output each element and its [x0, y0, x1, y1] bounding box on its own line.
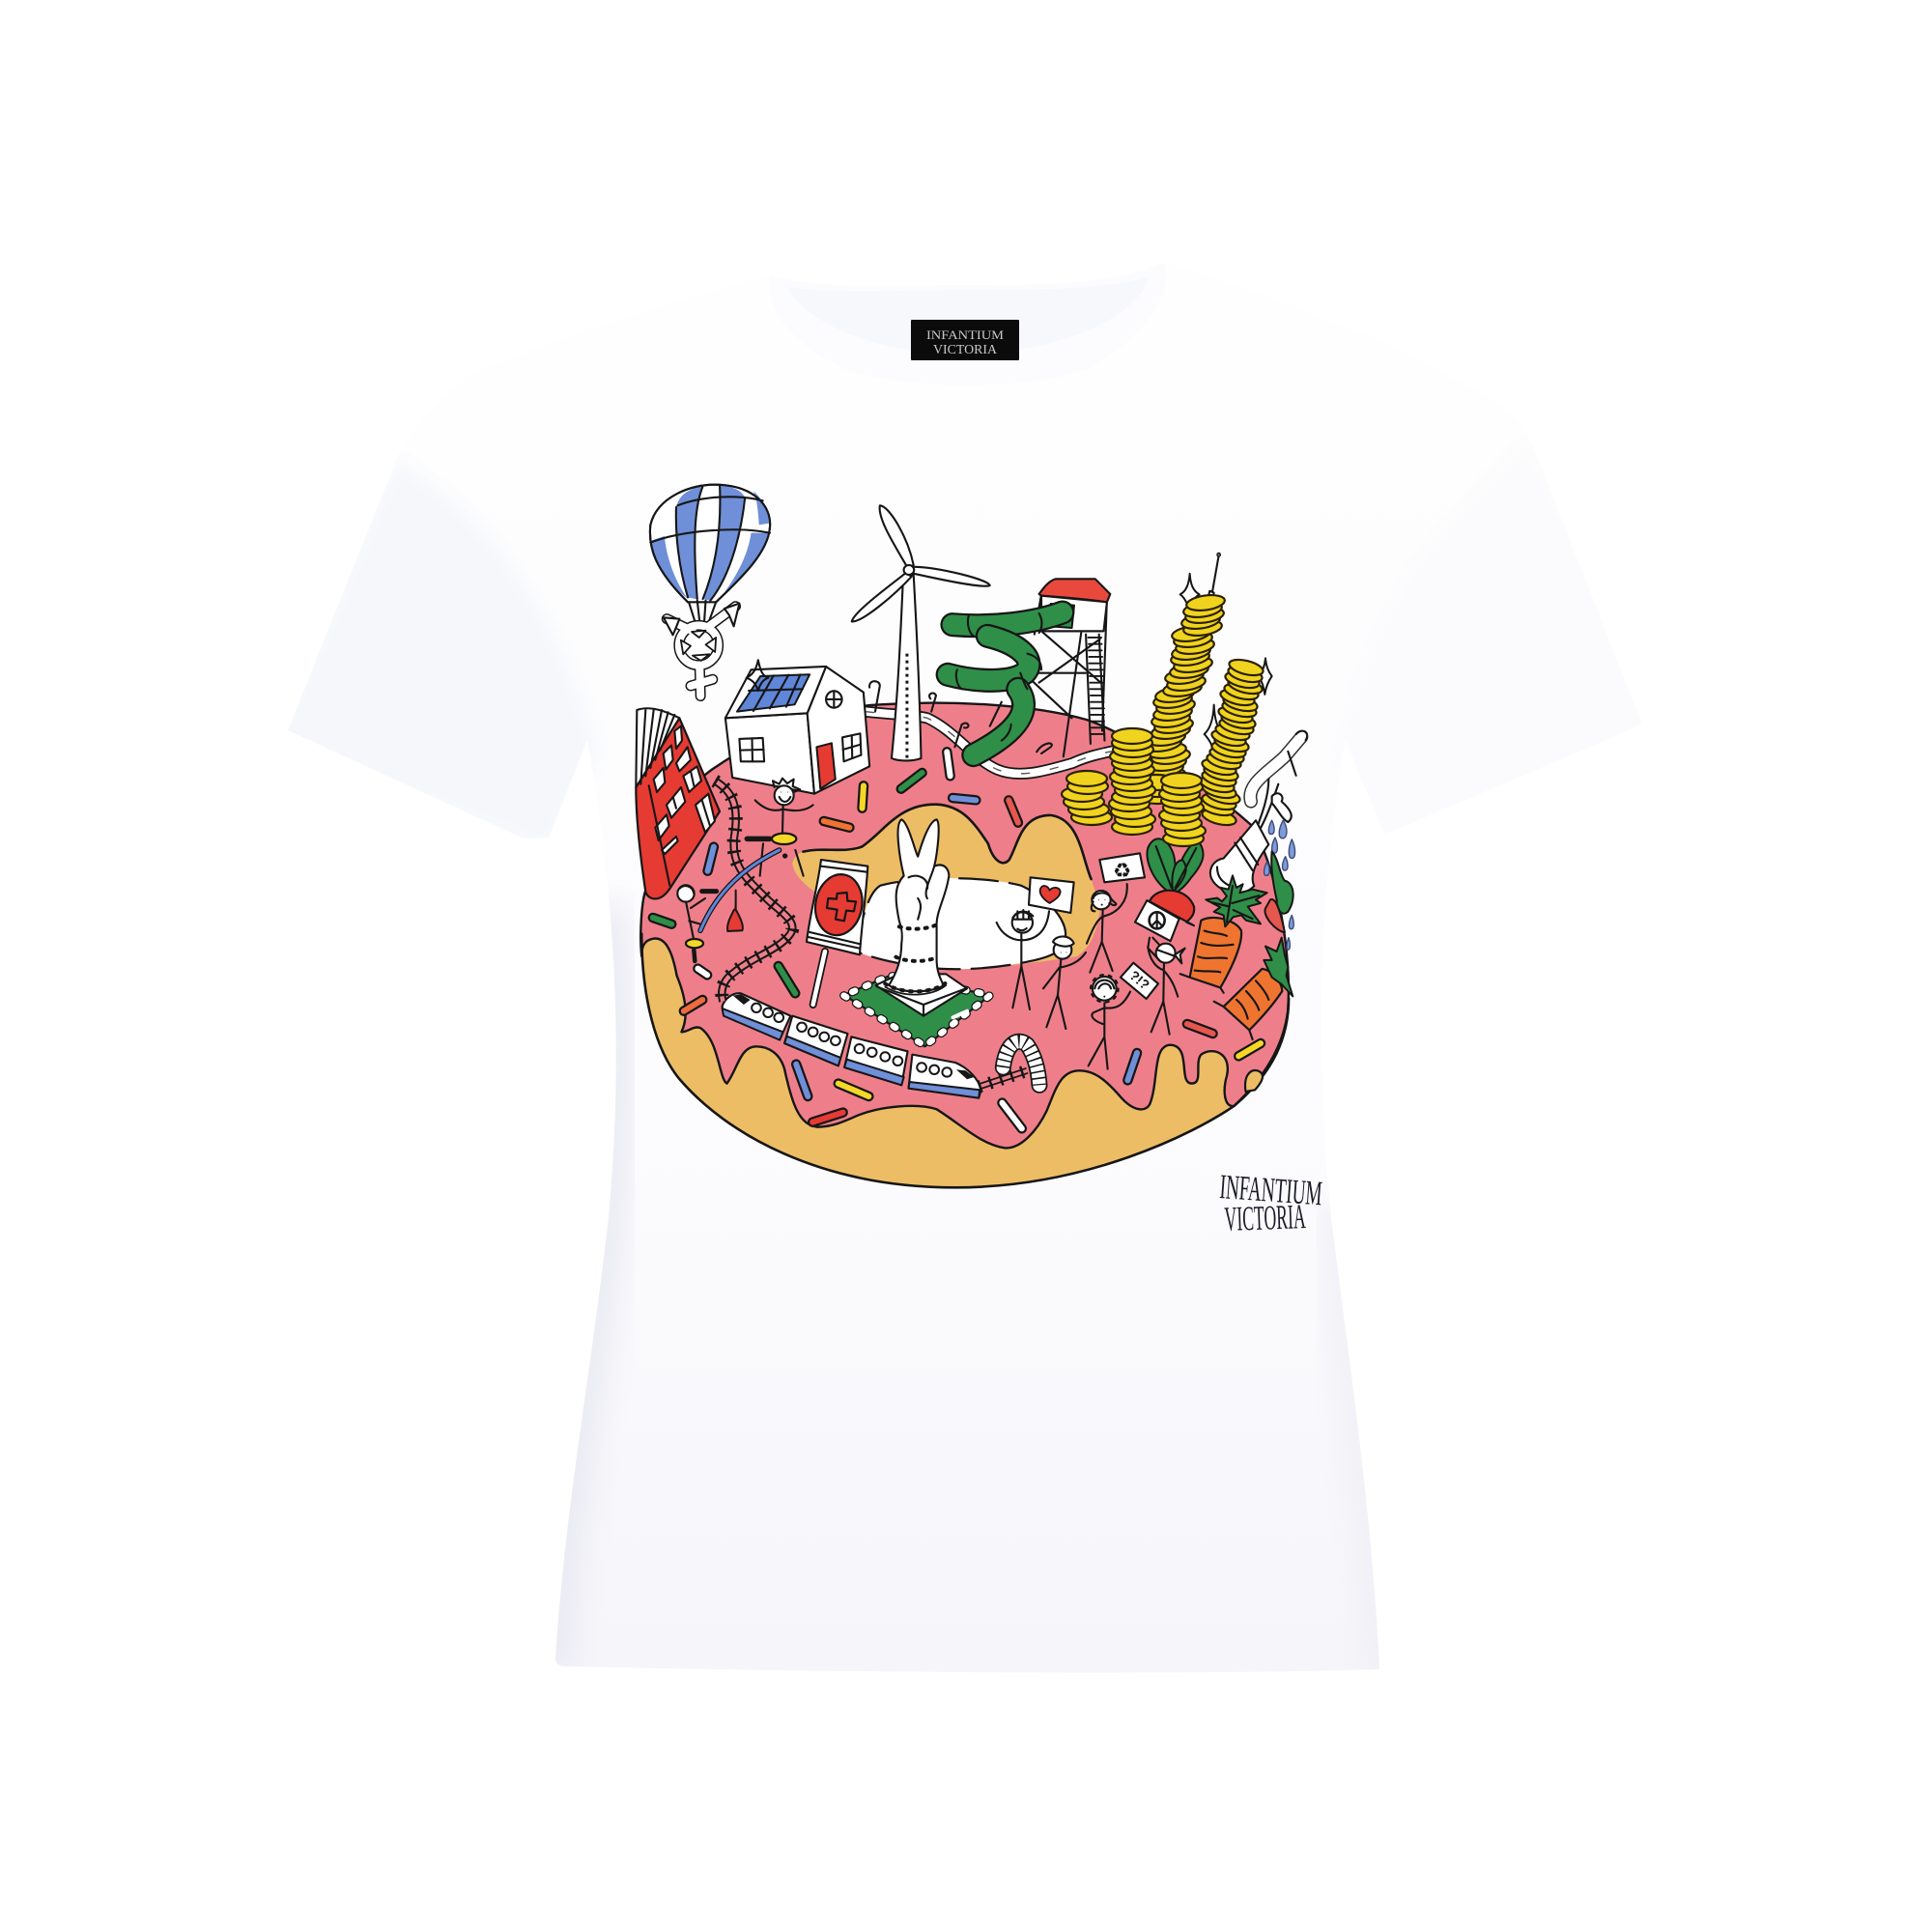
neck label: INFANTIUM: [926, 327, 1004, 342]
question sign: ?!?: [1126, 967, 1152, 993]
question sign: [1121, 963, 1158, 999]
hole edge line: [803, 805, 1092, 879]
neck label: VICTORIA: [933, 343, 998, 357]
carrot one: [1180, 875, 1267, 993]
water drops: [1264, 820, 1295, 950]
brand logo: INFANTIUM: [1218, 1167, 1323, 1212]
neck label: [911, 320, 1019, 360]
vegetables, faucet: [1135, 553, 1307, 1039]
red cone: [727, 891, 743, 931]
person on scooter top: [700, 779, 813, 930]
red vegetable at edge: [1264, 899, 1285, 932]
radish leaves: [1147, 838, 1204, 894]
house: [725, 660, 869, 794]
hot air balloon: [650, 485, 770, 621]
antenna: [1208, 555, 1219, 603]
front coin stack right: [1159, 773, 1206, 846]
donut outer edge: [641, 934, 1289, 1187]
shirt soft shading: [315, 480, 869, 1660]
hand pedestal dots: [885, 985, 946, 995]
green water slide: [948, 612, 1063, 755]
donut hole tan: [792, 805, 1100, 969]
person on scooter bottom: [677, 885, 717, 961]
railway track: [715, 781, 792, 1002]
brand logo: VICTORIA: [1224, 1197, 1306, 1238]
pink icing: [640, 703, 1289, 1148]
peace hand: [885, 819, 949, 991]
small coin pile: [1062, 771, 1178, 825]
collar inside neck: [787, 277, 1150, 355]
wind turbine: [852, 505, 990, 760]
sprinkles: [653, 752, 1261, 1128]
road: [866, 712, 1117, 774]
radish: [1150, 891, 1194, 925]
donut illustration: [640, 703, 1289, 1187]
water tap: [1210, 731, 1307, 893]
stick figure 5: [1148, 944, 1185, 1035]
stick figure 3: [1087, 884, 1127, 973]
buildings and wind turbine: [650, 485, 1110, 794]
t-shirt body: [288, 473, 1379, 1673]
peace sign: [1135, 900, 1179, 960]
train: [723, 993, 981, 1098]
front coin stack left: [1109, 728, 1155, 835]
brand logo: [1218, 1167, 1323, 1238]
slide tower: [990, 579, 1110, 756]
stick figure 1: [997, 910, 1049, 1009]
book building: [636, 708, 720, 898]
monument base: [844, 974, 990, 1046]
recycling sign: [1099, 853, 1145, 883]
street lamps: [869, 681, 1052, 753]
small tan drop: [1245, 1070, 1263, 1092]
lollipop: [807, 860, 867, 1005]
tunnel and track: [979, 1041, 1039, 1087]
collar inner: [769, 263, 1166, 385]
left side scene: [636, 708, 867, 1005]
donut base: [641, 889, 1289, 1187]
crowd scene: [979, 853, 1185, 1087]
right coin stack: [1199, 657, 1264, 828]
coin sparkles: [1180, 574, 1272, 754]
stick figure 2: [1043, 936, 1086, 1029]
white hole: [852, 878, 1065, 969]
stick figure 4: [1089, 975, 1130, 1069]
transgender symbol: [664, 604, 739, 696]
tall coin stack: [1142, 593, 1226, 785]
coin stacks: [1062, 593, 1264, 846]
beet leaves at edge: [1271, 851, 1293, 914]
carrot two: [1214, 938, 1293, 1039]
recycling sign: ♻: [1113, 859, 1131, 883]
heart sign: [1029, 877, 1074, 913]
